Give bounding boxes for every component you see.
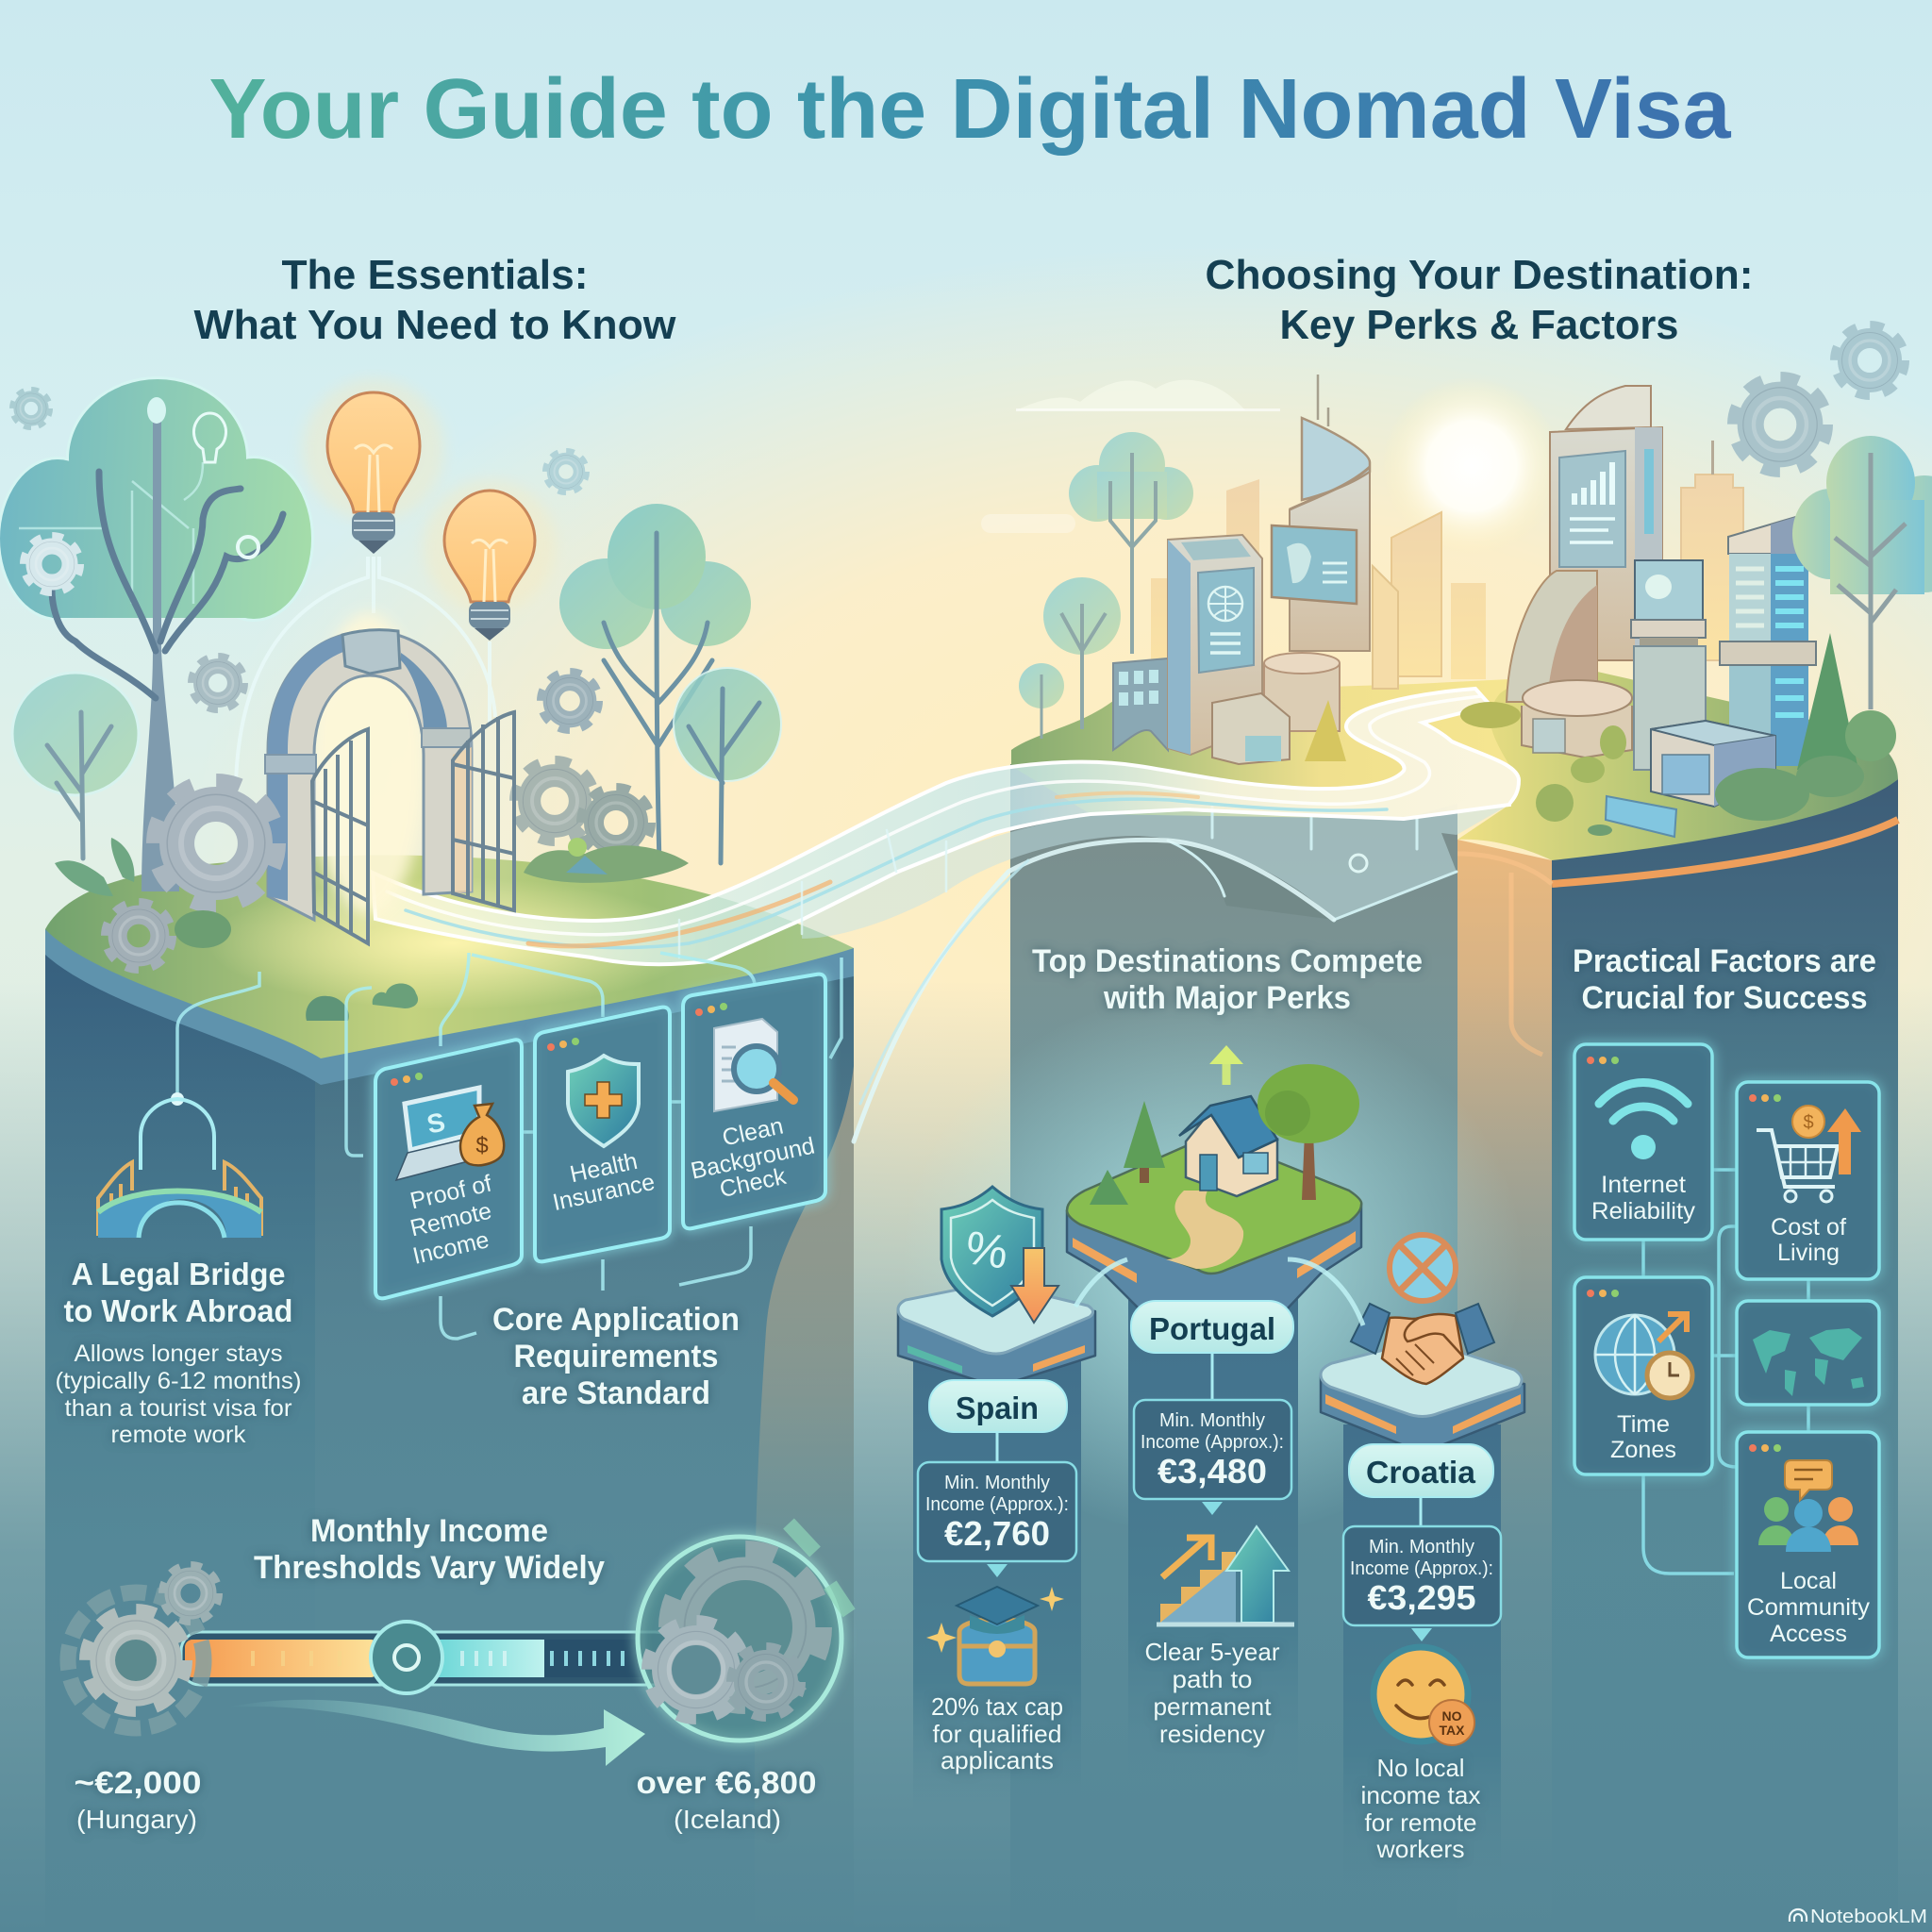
card: croatia income: €3,295 bbox=[1368, 1578, 1475, 1617]
icon: handshake bbox=[1351, 1304, 1494, 1384]
label: portugal bbox=[1131, 1301, 1293, 1353]
title: Your Guide to the Digital Nomad Visa bbox=[209, 62, 1731, 157]
sun bbox=[1382, 376, 1561, 556]
tree: large left bbox=[0, 379, 311, 891]
icon: light bulb large bbox=[303, 379, 444, 554]
panel: time zones bbox=[1574, 1277, 1712, 1474]
text: internet reliability: Internet bbox=[1601, 1172, 1686, 1198]
panel: spain column bbox=[898, 1187, 1095, 1821]
gate doors bbox=[312, 712, 514, 943]
text: low end bbox=[74, 1765, 202, 1834]
text: clean background check: Background bbox=[689, 1132, 817, 1185]
icon: smiley with no tax badge: TAX bbox=[1440, 1723, 1465, 1738]
icon: shield with percent and down arrow bbox=[941, 1187, 1058, 1323]
icon: world map bbox=[1753, 1328, 1864, 1396]
label: spain: Spain bbox=[956, 1391, 1039, 1425]
heading: the essentials: The Essentials: bbox=[281, 252, 589, 298]
panel: income thresholds bbox=[68, 1513, 849, 1834]
text: legal bridge description: Allows longer stays bbox=[74, 1341, 283, 1367]
text: legal bridge description: than a tourist visa for bbox=[64, 1395, 292, 1422]
panel: clean background check bbox=[683, 974, 825, 1228]
icon: laptop and money bag: $ bbox=[475, 1133, 489, 1158]
heading: a legal bridge bbox=[64, 1257, 292, 1328]
text: time zones bbox=[1610, 1411, 1676, 1463]
panel: local community access bbox=[1737, 1432, 1879, 1657]
text: local community access: Access bbox=[1770, 1621, 1847, 1647]
right island mid surface bbox=[1011, 679, 1528, 819]
icon: shopping cart with coin and up arrow bbox=[1757, 1106, 1861, 1202]
text: portugal perk bbox=[1145, 1638, 1280, 1748]
icon: laptop and money bag: S bbox=[425, 1107, 447, 1140]
connector lines right bbox=[1643, 1170, 1808, 1574]
text: health insurance: Insurance bbox=[550, 1169, 658, 1216]
heading: top destinations bbox=[1032, 943, 1423, 1016]
panel: internet reliability bbox=[1574, 1044, 1712, 1240]
text: clean background check bbox=[689, 1113, 817, 1203]
heading: core application requirements: Core Application bbox=[492, 1302, 740, 1338]
river flow and bridge deck bbox=[373, 689, 1519, 1141]
connector lines left bbox=[177, 953, 841, 1339]
card: spain income bbox=[918, 1462, 1076, 1561]
heading: core application requirements: Requirements bbox=[513, 1339, 719, 1374]
heading: the essentials bbox=[194, 252, 676, 348]
card: spain income: Income (Approx.): bbox=[925, 1494, 1069, 1515]
card: portugal income: €3,480 bbox=[1158, 1452, 1267, 1491]
heading: choosing your destination: Key Perks & Factors bbox=[1279, 302, 1679, 348]
icon: gear on tree bbox=[25, 537, 79, 591]
text: cost of living: Living bbox=[1777, 1240, 1840, 1266]
heading: a legal bridge: to Work Abroad bbox=[64, 1293, 292, 1328]
card: portugal income: Min. Monthly bbox=[1159, 1410, 1265, 1431]
text: croatia perk: income tax bbox=[1360, 1781, 1481, 1809]
heading: choosing your destination bbox=[1206, 252, 1753, 348]
card: croatia income: Min. Monthly bbox=[1369, 1537, 1474, 1557]
panel: portugal column bbox=[1067, 1045, 1361, 1783]
icon: bridge bbox=[98, 1092, 261, 1238]
icon: shopping cart with coin and up arrow: $ bbox=[1803, 1112, 1814, 1133]
tree: right of gate bbox=[559, 504, 751, 864]
tree: far right of gate bbox=[674, 668, 781, 863]
label: spain bbox=[929, 1380, 1067, 1432]
icon: spain platform bbox=[898, 1283, 1095, 1387]
icon: wifi bbox=[1599, 1083, 1688, 1159]
foliage bbox=[55, 838, 231, 948]
text: croatia perk: No local bbox=[1377, 1754, 1464, 1782]
heading: top destinations: Top Destinations Compete bbox=[1032, 943, 1423, 979]
text: health insurance: Health bbox=[568, 1148, 640, 1188]
bottom fade bbox=[0, 981, 1932, 1932]
tree: small left bbox=[12, 673, 139, 858]
text: proof of remote income: Remote bbox=[408, 1198, 494, 1241]
panel: cost of living bbox=[1737, 1082, 1879, 1279]
text: spain perk: 20% tax cap bbox=[931, 1692, 1063, 1721]
icon: croatia platform bbox=[1321, 1342, 1524, 1453]
chart: income slider bar bbox=[181, 1622, 675, 1693]
text: low end: ~€2,000 bbox=[74, 1765, 202, 1800]
text: portugal perk: Clear 5-year bbox=[1145, 1638, 1280, 1666]
panel: croatia column bbox=[1321, 1235, 1524, 1896]
icon: shield with percent and down arrow: % bbox=[962, 1221, 1011, 1279]
heading: core application requirements bbox=[492, 1302, 740, 1411]
icon: portugal island with house bbox=[1067, 1045, 1361, 1351]
text: local community access bbox=[1747, 1568, 1871, 1647]
gears behind gate right bbox=[516, 762, 689, 883]
heading: the essentials: What You Need to Know bbox=[194, 302, 676, 348]
text: proof of remote income bbox=[408, 1171, 494, 1270]
icons: floating gears bbox=[12, 390, 598, 729]
icon: light bulb small bbox=[424, 480, 556, 641]
text: clean background check: Clean bbox=[720, 1113, 786, 1151]
heading: practical factors: Crucial for Success bbox=[1581, 980, 1868, 1016]
heading: monthly income thresholds: Monthly Income bbox=[310, 1513, 548, 1549]
text: clean background check: Check bbox=[717, 1163, 789, 1203]
left island surface bbox=[45, 856, 854, 1085]
icon: document with magnifier bbox=[714, 1019, 793, 1111]
panel: proof of remote income bbox=[375, 1040, 522, 1298]
text: croatia perk bbox=[1360, 1754, 1481, 1863]
text: legal bridge description: (typically 6-12 months) bbox=[55, 1368, 302, 1394]
heading: monthly income thresholds: Thresholds Vary Widely bbox=[254, 1550, 605, 1586]
icon: smiley with no tax badge: NO bbox=[1441, 1708, 1462, 1724]
heading: a legal bridge: A Legal Bridge bbox=[72, 1257, 285, 1291]
text: local community access: Local bbox=[1780, 1568, 1837, 1594]
text: portugal perk: path to bbox=[1172, 1665, 1253, 1693]
text: proof of remote income: Income bbox=[410, 1226, 491, 1270]
gate arch bbox=[265, 613, 472, 920]
icon: gears high end bbox=[638, 1524, 849, 1740]
heading: choosing your destination: Choosing Your Destination: bbox=[1206, 252, 1753, 298]
icons: gears right sky bbox=[1735, 326, 1904, 470]
left pillar bbox=[45, 929, 854, 1932]
card: croatia income: Income (Approx.): bbox=[1350, 1558, 1493, 1579]
text: time zones: Time bbox=[1617, 1411, 1670, 1438]
card: portugal income bbox=[1134, 1400, 1291, 1499]
text: legal bridge description: remote work bbox=[111, 1422, 246, 1448]
large gear bbox=[156, 783, 276, 904]
text: portugal perk: permanent bbox=[1153, 1692, 1272, 1721]
icon: crossed circle bbox=[1390, 1235, 1456, 1301]
text: internet reliability bbox=[1591, 1172, 1696, 1224]
text: low end: (Hungary) bbox=[76, 1805, 197, 1834]
right island right surface bbox=[1457, 660, 1898, 860]
city: left cluster bbox=[1113, 375, 1486, 764]
icon: stairs and up arrow bbox=[1157, 1526, 1294, 1624]
label: portugal: Portugal bbox=[1149, 1311, 1275, 1346]
icon: globe with clock bbox=[1595, 1314, 1692, 1398]
heading: practical factors: Practical Factors are bbox=[1573, 943, 1876, 979]
heading: monthly income thresholds bbox=[254, 1513, 605, 1586]
icon: gears low end bbox=[68, 1566, 218, 1728]
label: croatia: Croatia bbox=[1366, 1455, 1476, 1490]
label: croatia bbox=[1349, 1444, 1493, 1497]
text: internet reliability: Reliability bbox=[1591, 1198, 1696, 1224]
icon: treasure chest with graduation cap bbox=[926, 1587, 1064, 1684]
city: right cluster bbox=[1460, 386, 1896, 837]
panel: legal bridge bbox=[55, 1092, 302, 1448]
right pillars bbox=[1010, 764, 1898, 1932]
text: cost of living bbox=[1771, 1214, 1846, 1266]
text: croatia perk: workers bbox=[1375, 1835, 1464, 1863]
small gear bbox=[107, 904, 171, 968]
light beams from bulbs bbox=[236, 557, 495, 783]
text: time zones: Zones bbox=[1610, 1437, 1676, 1463]
glow behind destinations bbox=[901, 991, 1524, 1538]
heading: top destinations: with Major Perks bbox=[1103, 980, 1351, 1016]
text: high end: over €6,800 bbox=[636, 1765, 817, 1800]
text: portugal perk: residency bbox=[1159, 1720, 1265, 1748]
icon: community people with speech bubble bbox=[1758, 1460, 1858, 1552]
icon: shield with plus bbox=[568, 1056, 639, 1146]
card: spain income: Min. Monthly bbox=[944, 1473, 1050, 1493]
text: high end bbox=[636, 1765, 817, 1834]
heading: core application requirements: are Standard bbox=[522, 1375, 710, 1411]
text: high end: (Iceland) bbox=[674, 1805, 781, 1834]
card: portugal income: Income (Approx.): bbox=[1141, 1432, 1284, 1453]
panel: health insurance bbox=[535, 1008, 670, 1261]
text: croatia perk: for remote bbox=[1364, 1808, 1477, 1837]
NotebookLM watermark: NotebookLM bbox=[1810, 1907, 1927, 1927]
text: spain perk: for qualified bbox=[932, 1720, 1062, 1748]
panel: world map bbox=[1737, 1301, 1879, 1405]
text: legal bridge description bbox=[55, 1341, 302, 1448]
arrow: income range bbox=[226, 1700, 645, 1766]
text: proof of remote income: Proof of bbox=[408, 1171, 494, 1214]
icon: laptop and money bag bbox=[396, 1088, 504, 1180]
heading: practical factors bbox=[1573, 943, 1876, 1016]
text: health insurance bbox=[550, 1148, 658, 1216]
icon: smiley with no tax badge bbox=[1374, 1647, 1474, 1745]
arrows: flows between platforms bbox=[1075, 1259, 1363, 1325]
text: spain perk: applicants bbox=[941, 1746, 1054, 1774]
card: croatia income bbox=[1343, 1526, 1501, 1625]
trees: right side bbox=[1019, 432, 1932, 739]
text: local community access: Community bbox=[1747, 1594, 1871, 1621]
text: cost of living: Cost of bbox=[1771, 1214, 1846, 1241]
text: spain perk bbox=[931, 1692, 1063, 1774]
card: spain income: €2,760 bbox=[944, 1514, 1050, 1553]
